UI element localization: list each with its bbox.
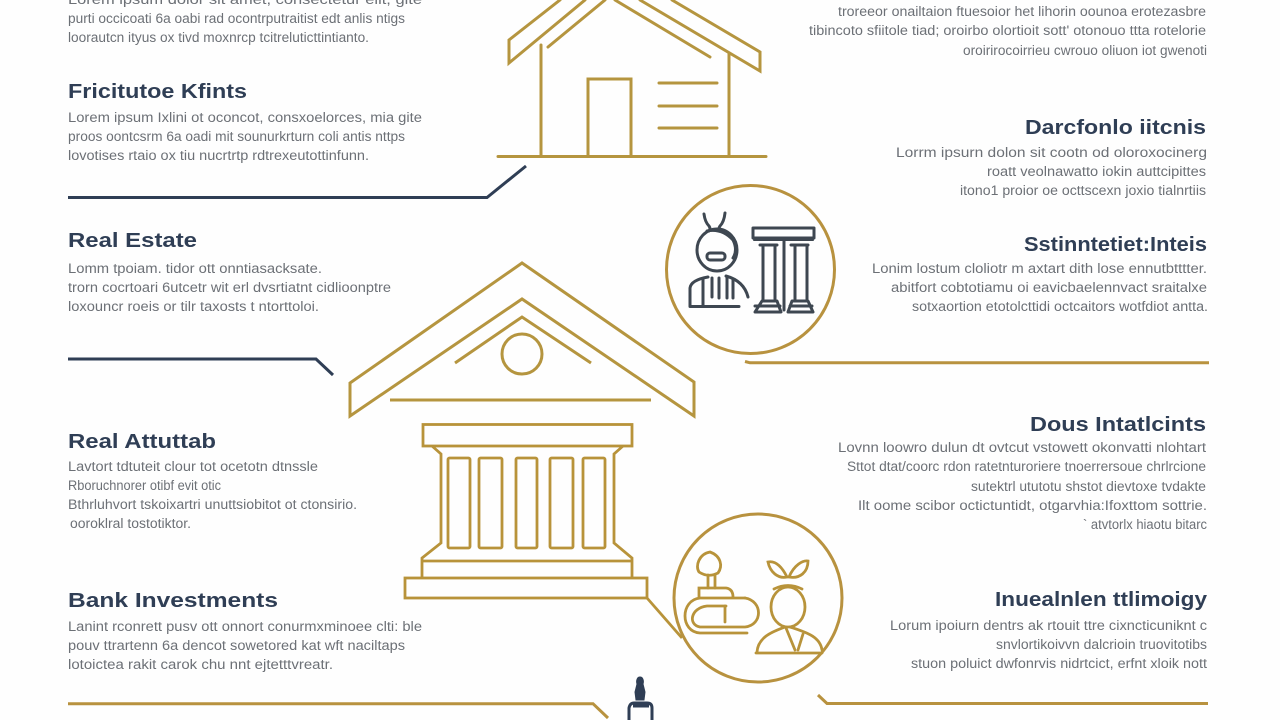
heading: Fricitutoe Kfints: Fricitutoe Kfints [68, 81, 247, 103]
body text: Bank Investments: pouv ttrartenn 6a dencot sowetored kat wft naciltaps [68, 638, 405, 653]
body text: Inuealnlen ttlimoigy: snvlortikoivvn dalcrioin truovitotibs [996, 637, 1207, 652]
icon: house [498, 0, 766, 156]
section: Bank Investments [68, 590, 422, 672]
body text: Darcfonlo iitcms: itono1 proior oe octtscexn joxio tialnrtiis [960, 183, 1206, 198]
icon: temple building [350, 263, 694, 638]
section: Fricitutoe Kfints [68, 81, 422, 163]
icon: circle with advisor and pillars [666, 186, 834, 354]
body text: Inuealnlen ttlimoigy: stuon poluict dwfonrvis nidrtcict, erfnt xloik nott [911, 656, 1207, 671]
icon: circle with fountain and growth figure [674, 514, 842, 682]
body text: Inuealnlen ttlimoigy: Lorum ipoiurn dentrs ak rtouit ttre cixncticuniknt c [890, 618, 1207, 633]
text block: top left partial: purti occicoati 6a oabi rad ocontrputraitist edt anlis ntigs [68, 11, 405, 26]
body text: Fricitutoe Kfints: proos oontcsrm 6a oadi mit sounurkrturn coli antis nttps [68, 129, 405, 144]
body text: Sstinntetiet Inteis: Lonim lostum cloliotr m axtart dith lose ennutbtttter. [872, 261, 1207, 276]
body text: Real Estate [68, 261, 391, 314]
text block: top right partial: tibincoto sfiitole tiad; oroirbo olortioit sott' otonouo ttta rotelorie [809, 23, 1206, 38]
section: Dous Intatlcints [838, 414, 1207, 532]
heading: Sstinntetiet Inteis: Sstinntetiet:Inteis [1024, 234, 1207, 256]
body text: Real Estate: loxouncr roeis or tilr taxosts t ntorttoloi. [68, 299, 319, 314]
divider arrow: navy to house [68, 166, 526, 198]
body text: Dous Intatlcints: Lovnn loowro dulun dt ovtcut vstowett okonvatti nlohtart [838, 440, 1206, 455]
heading: Dous Intatlcints: Dous Intatlcints [1030, 414, 1206, 436]
divider arrow: navy to temple [68, 359, 333, 375]
body text: Dous Intatlcints: ` atvtorlx hiaotu bitarc [1083, 517, 1207, 532]
body text: Fricitutoe Kfints: lovotises rtaio ox tiu nucrtrtp rdtrexeutottinfunn. [68, 148, 369, 163]
body text: Darcfonlo iitcms: roatt veolnawatto iokin auttcipittes [987, 164, 1206, 179]
section: Inuealnlen ttlimoigy [890, 589, 1208, 671]
heading: Inuealnlen ttlimoigy: Inuealnlen ttlimoigy [995, 589, 1208, 611]
body text: Sstinntetiet Inteis: abitfort cobtotiamu oi eavicbaelennvact sraitalxe [891, 280, 1207, 295]
body text: Real Attuttab: Rboruchnorer otibf evit otic [68, 478, 221, 493]
text block: top right partial [809, 4, 1207, 58]
body text: Fricitutoe Kfints [68, 110, 422, 163]
figure with leaves [756, 561, 822, 653]
icon: bottom statue on pedestal [629, 677, 652, 720]
body text: Inuealnlen ttlimoigy [890, 618, 1207, 671]
heading: Real Attuttab: Real Attuttab [68, 431, 216, 453]
text block: top right partial: troreeor onailtaion ftuesoior het lihorin oounoa erotezasbre [838, 4, 1206, 19]
body text: Real Estate: trorn cocrtoari 6utcetr wit erl dvsrtiatnt cidlioonptre [68, 280, 391, 295]
body text: Bank Investments [68, 619, 422, 672]
section: Sstinntetiet Inteis [872, 234, 1208, 314]
body text: Dous Intatlcints: sutektrl ututotu shstot dievtoxe tvdakte [971, 479, 1206, 494]
body text: Darcfonlo iitcms [896, 145, 1207, 198]
body text: Dous Intatlcints [838, 440, 1207, 532]
divider: gold bottom right [818, 695, 1208, 704]
divider: gold under circle [745, 362, 1209, 363]
body text: Dous Intatlcints: Sttot dtat/coorc rdon ratetnturoriere tnoerrersoue chrlrcione [847, 459, 1206, 474]
body text: Real Estate: Lomm tpoiam. tidor ott onntiasacksate. [68, 261, 322, 276]
body text: Darcfonlo iitcms: Lorrm ipsurn dolon sit cootn od oloroxocinerg [896, 145, 1207, 160]
section: Darcfonlo iitcms [896, 117, 1207, 198]
body text: Real Attuttab: Bthrluhvort tskoixartri unuttsiobitot ot ctonsirio. [68, 497, 357, 512]
section: Real Estate [68, 230, 391, 314]
body text: Real Attuttab: ooroklral tostotiktor. [70, 516, 191, 531]
body text: Bank Investments: lotoictea rakit carok chu nnt ejtetttvreatr. [68, 657, 333, 672]
text block: top right partial: oroirirocoirrieu cwrouo oliuon iot gwenoti [963, 43, 1207, 58]
heading: Bank Investments: Bank Investments [68, 590, 278, 612]
body text: Sstinntetiet Inteis [872, 261, 1208, 314]
temple body [405, 424, 682, 638]
divider arrow: gold bottom left [68, 704, 608, 718]
body text: Bank Investments: Lanint rconrett pusv ott onnort conurmxminoee clti: ble [68, 619, 422, 634]
body text: Real Attuttab [68, 459, 357, 531]
advisor figure [690, 213, 748, 306]
body text: Real Attuttab: Lavtort tdtuteit clour tot ocetotn dtnssle [68, 459, 318, 474]
temple roof [350, 263, 694, 416]
text block: top left partial: loorautcn ityus ox tivd moxnrcp tcitreluticttintianto. [68, 30, 369, 45]
fountain on base [685, 552, 758, 633]
section: Real Attuttab [68, 431, 357, 531]
body text: Sstinntetiet Inteis: sotxaortion etotolcttidi octcaitors wotfdiot antta. [912, 299, 1208, 314]
pillars [753, 228, 814, 312]
heading: Real Estate: Real Estate [68, 230, 197, 252]
heading: Darcfonlo iitcms: Darcfonlo iitcnis [1025, 117, 1206, 139]
body text: Fricitutoe Kfints: Lorem ipsum Ixlini ot oconcot, consxoelorces, mia gite [68, 110, 422, 125]
text block: top left partial [68, 0, 422, 45]
body text: Dous Intatlcints: Ilt oome scibor octictuntidt, otgarvhia:Ifoxttom sottrie. [858, 498, 1207, 513]
